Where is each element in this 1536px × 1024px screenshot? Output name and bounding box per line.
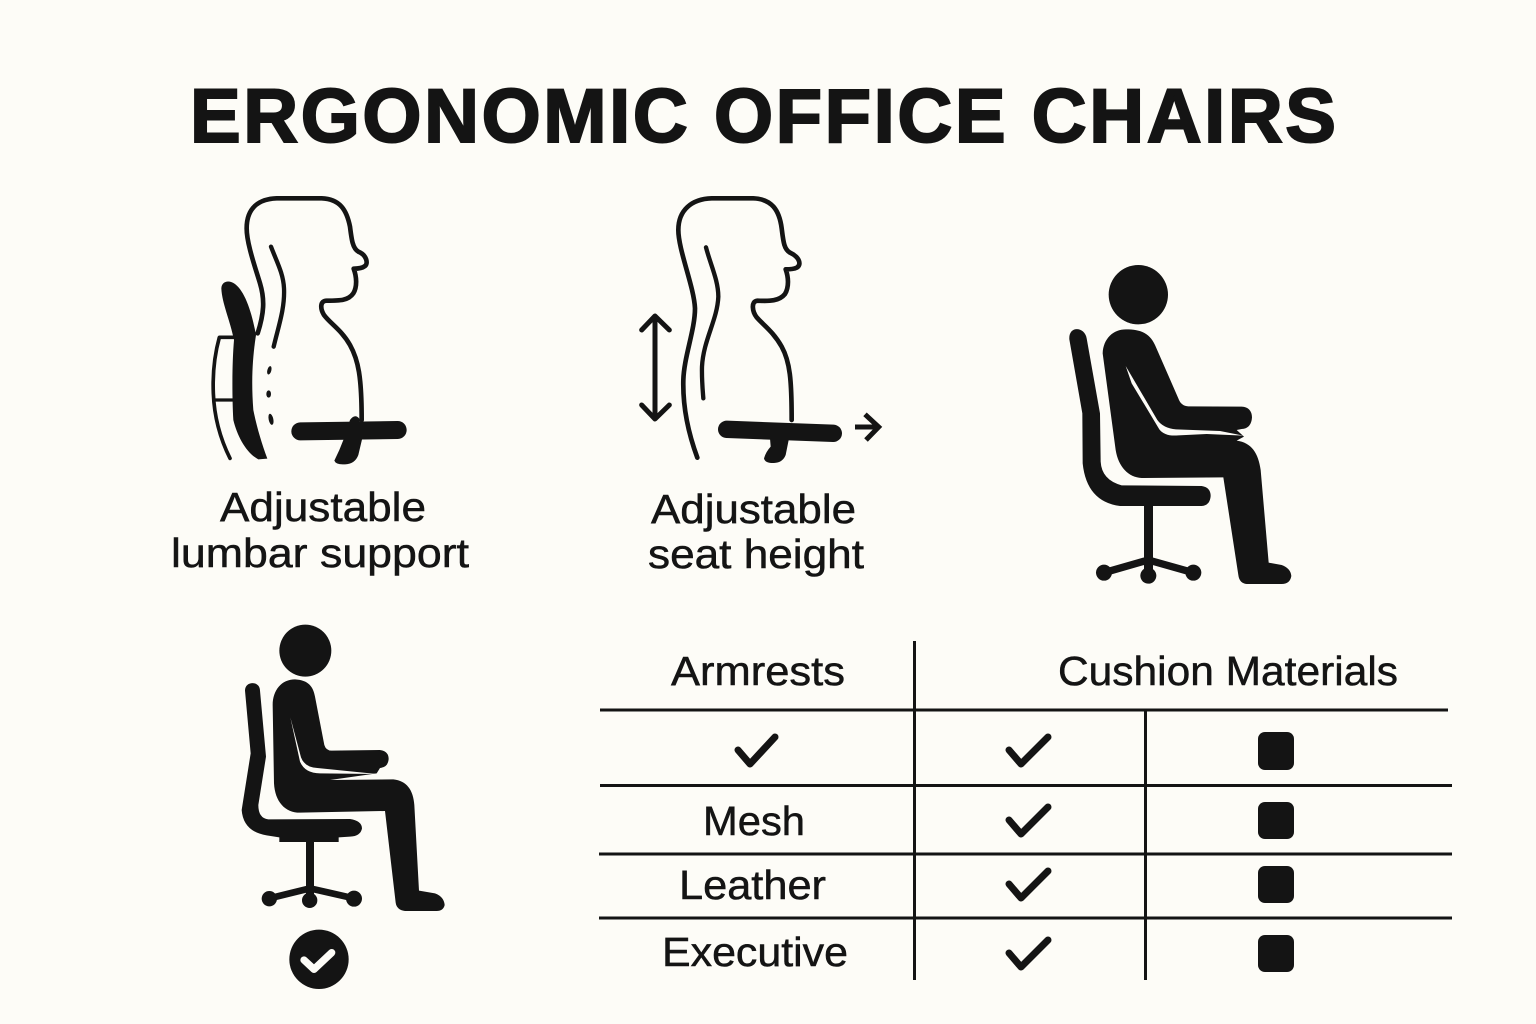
label: adjustable seat height [648,486,865,577]
row label: leather: Leather [679,862,826,908]
icon: lumbar support profile [213,198,398,464]
icon: seat height profile [642,198,879,463]
table header: armrests: Armrests [671,648,845,694]
icon: seated person with check badge [242,625,445,989]
label: adjustable seat height: seat height [648,531,865,577]
row label: mesh: Mesh [703,798,805,844]
row label: executive: Executive [662,929,848,975]
label: adjustable seat height: Adjustable [651,486,856,532]
table header: cushion materials: Cushion Materials [1058,648,1398,694]
comparison table [599,641,1452,980]
label: adjustable lumbar support: Adjustable [220,484,426,530]
panel: adjustable seat height [642,198,879,577]
check marks [738,737,1048,967]
square markers [1258,732,1294,972]
panel: adjustable lumbar support [171,198,470,576]
title: ERGONOMIC OFFICE CHAIRS [190,74,1336,159]
label: adjustable lumbar support [171,484,470,576]
label: adjustable lumbar support: lumbar support [171,530,470,576]
icon: seated person in ergonomic chair [1069,265,1291,584]
icon: check badge [289,930,349,989]
